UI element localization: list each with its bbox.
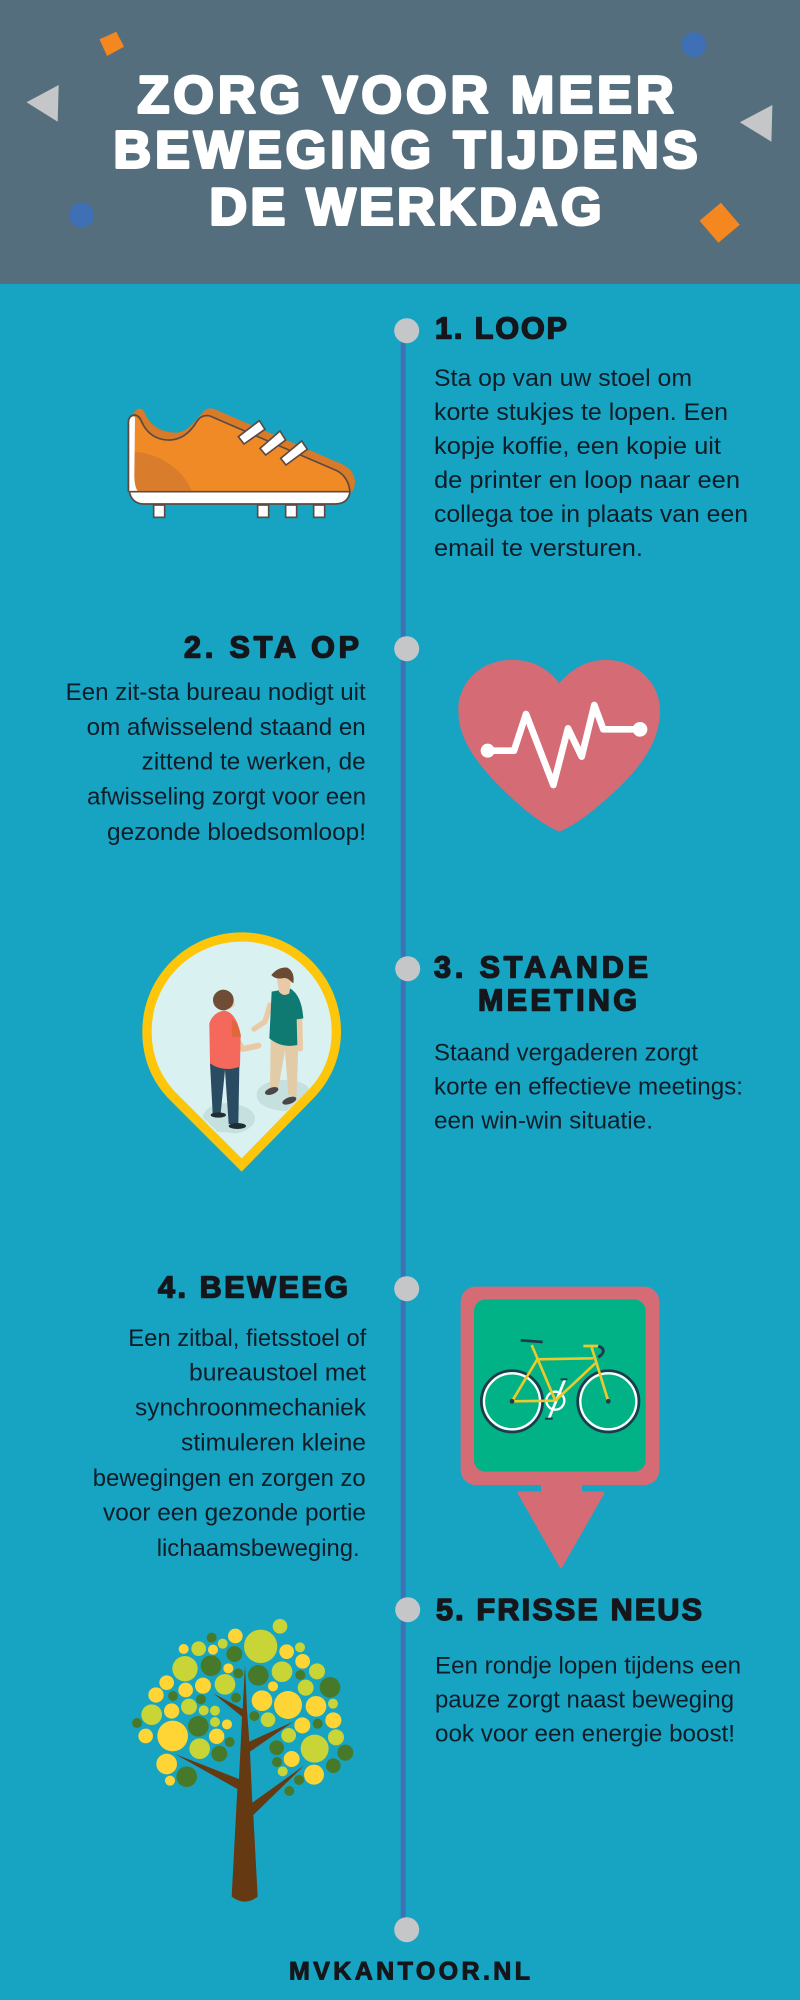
text block: frisse neus: pauze zorgt naast beweging: [435, 1686, 734, 1713]
icon: heart with heartbeat: [458, 660, 660, 832]
heading: 2. Sta op: 2. STA OP: [184, 630, 359, 664]
green shirt person: [254, 968, 303, 1106]
text block: sta op: gezonde bloedsomloop!: [107, 819, 366, 846]
heading: 1. Loop: 1. LOOP: [435, 312, 567, 346]
text block: sta op: Een zit-sta bureau nodigt uit: [66, 679, 366, 706]
title: ZORG VOOR MEER: [138, 66, 674, 124]
title: DE WERKDAG: [210, 178, 602, 236]
text block: beweeg: synchroonmechaniek: [135, 1394, 367, 1421]
text block: sta op: [66, 679, 366, 846]
icon: map pin with two people: [142, 932, 341, 1172]
text block: loop: korte stukjes te lopen. Een: [434, 399, 728, 426]
text block: beweeg: voor een gezonde portie: [103, 1500, 366, 1527]
text block: beweeg: [93, 1325, 367, 1562]
icon: shoe: [128, 408, 355, 517]
icon: bicycle sign: [461, 1287, 659, 1566]
text block: loop: kopje koffie, een kopie uit: [434, 433, 721, 460]
bicycle: [481, 1340, 639, 1432]
text block: loop: email te versturen.: [434, 535, 643, 562]
text block: staande meeting: een win-win situatie.: [434, 1108, 653, 1135]
heading: 3. Staande meeting: 3. STAANDE: [434, 950, 648, 984]
red shirt person: [209, 990, 258, 1129]
text block: loop: de printer en loop naar een: [434, 467, 740, 494]
title: BEWEGING TIJDENS: [114, 122, 698, 180]
text block: beweeg: bewegingen en zorgen zo: [93, 1465, 366, 1492]
heading: 3. Staande meeting: MEETING: [478, 984, 637, 1018]
text block: sta op: afwisseling zorgt voor een: [87, 784, 366, 811]
text block: loop: collega toe in plaats van een: [434, 501, 748, 528]
text block: beweeg: stimuleren kleine: [181, 1430, 366, 1457]
text block: sta op: zittend te werken, de: [142, 749, 366, 776]
text block: frisse neus: ook voor een energie boost!: [435, 1720, 735, 1747]
text block: staande meeting: korte en effectieve meetings:: [434, 1074, 743, 1101]
text block: frisse neus: [435, 1652, 741, 1747]
heading: 5. Frisse neus: 5. FRISSE NEUS: [436, 1593, 702, 1627]
heading: 3. Staande meeting: [434, 950, 648, 1018]
title: [114, 66, 698, 236]
text block: beweeg: bureaustoel met: [189, 1360, 366, 1387]
text block: beweeg: Een zitbal, fietsstoel of: [128, 1325, 367, 1352]
text block: frisse neus: Een rondje lopen tijdens een: [435, 1652, 741, 1679]
heading: 4. Beweeg: 4. BEWEEG: [158, 1270, 348, 1304]
decorative confetti shapes: [26, 32, 772, 243]
icon: tree: [132, 1619, 353, 1902]
footer: website name: MVKANTOOR.NL: [289, 1958, 530, 1986]
timeline line with nodes: [394, 318, 420, 1942]
text block: staande meeting: [434, 1040, 743, 1135]
text block: sta op: om afwisselend staand en: [87, 714, 366, 741]
text block: loop: [434, 365, 748, 562]
text block: staande meeting: Staand vergaderen zorgt: [434, 1040, 698, 1067]
text block: loop: Sta op van uw stoel om: [434, 365, 692, 392]
header banner: [0, 0, 800, 284]
text block: beweeg: lichaamsbeweging.: [157, 1535, 360, 1562]
